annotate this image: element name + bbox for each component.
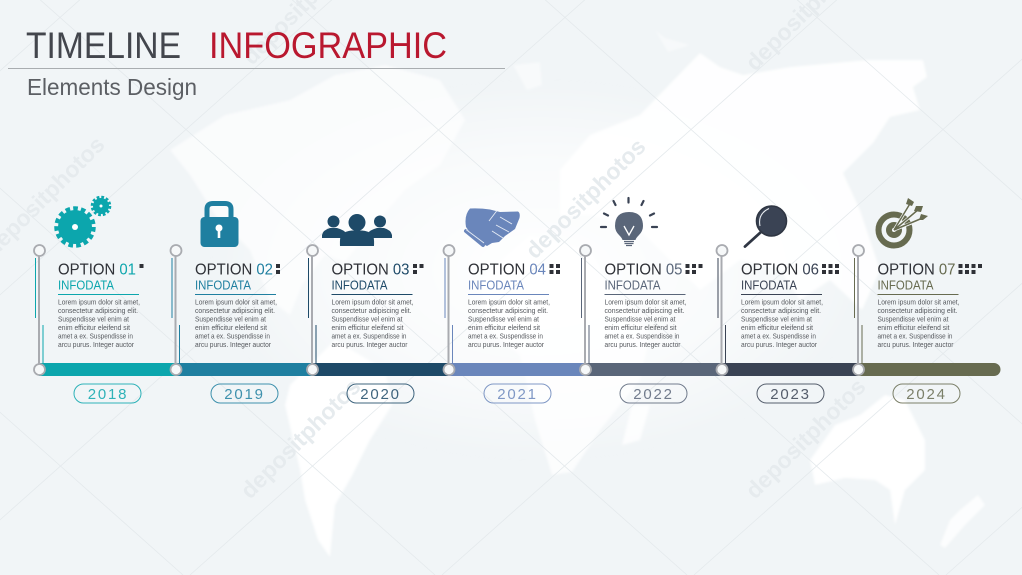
body text (468, 298, 550, 349)
progress squares (276, 264, 280, 274)
body text: enim efficitur eleifend sit (468, 323, 540, 332)
timeline bar (39, 363, 1000, 376)
body text (332, 298, 414, 349)
body text: enim efficitur eleifend sit (878, 323, 950, 332)
body text: amet a ex. Suspendisse in (604, 332, 680, 340)
body text: amet a ex. Suspendisse in (332, 332, 406, 340)
body text (58, 298, 140, 349)
year pill: 2019 (224, 386, 265, 403)
body text: arcu purus. Integer auctor (604, 340, 681, 349)
panel: option 07 (853, 198, 982, 403)
year pill: 2018 (88, 386, 128, 403)
icon: padlock (200, 204, 238, 247)
body text: enim efficitur eleifend sit (604, 323, 676, 332)
body text: Suspendisse vel enim at (468, 314, 539, 324)
option heading: OPTION 06 (741, 262, 819, 278)
year pill: 2021 (497, 386, 538, 403)
watermark text: depositphotos (740, 373, 871, 504)
option heading: OPTION 01 (58, 262, 136, 278)
panel: option 01 (34, 197, 144, 403)
year pill (74, 384, 141, 403)
icon: gears (56, 197, 110, 246)
watermark text: depositphotos (235, 373, 366, 504)
body text: Lorem ipsum dolor sit amet, (604, 298, 686, 306)
option heading: OPTION 07 (878, 262, 956, 278)
option heading: OPTION 02 (195, 262, 273, 278)
body text: Suspendisse vel enim at (604, 314, 676, 324)
body text: Suspendisse vel enim at (58, 314, 129, 324)
body text: Lorem ipsum dolor sit amet, (332, 298, 414, 306)
body text: amet a ex. Suspendisse in (878, 332, 952, 340)
year pill (893, 384, 960, 403)
year pill (211, 384, 278, 403)
background world map (170, 30, 985, 557)
year pill (347, 384, 414, 403)
icon: lightbulb (601, 198, 657, 246)
body text: enim efficitur eleifend sit (195, 323, 267, 332)
progress squares (958, 264, 982, 274)
body text: consectetur adipiscing elit. (468, 306, 548, 315)
icon: magnifying glass (745, 206, 786, 246)
infodata label: INFODATA (468, 278, 525, 292)
body text: consectetur adipiscing elit. (195, 306, 275, 315)
body text: arcu purus. Integer auctor (195, 340, 272, 349)
option heading: OPTION 05 (604, 262, 682, 278)
infodata label: INFODATA (604, 278, 661, 292)
option heading: OPTION 04 (468, 262, 546, 278)
progress squares (550, 264, 560, 274)
body text: amet a ex. Suspendisse in (741, 332, 816, 340)
icon: people (322, 214, 392, 246)
progress squares (413, 264, 424, 274)
body text: arcu purus. Integer auctor (468, 340, 545, 349)
body text: arcu purus. Integer auctor (878, 340, 954, 349)
body text: Suspendisse vel enim at (741, 314, 812, 324)
body text (741, 298, 823, 349)
year pill: 2020 (360, 386, 401, 403)
panel: option 03 (307, 214, 424, 403)
year pill (484, 384, 551, 403)
panel: option 06 (716, 206, 839, 403)
body text: arcu purus. Integer auctor (58, 340, 135, 349)
year pill: 2024 (906, 386, 947, 403)
year pill (757, 384, 824, 403)
body text: Suspendisse vel enim at (195, 314, 266, 324)
body text (604, 298, 686, 349)
body text: consectetur adipiscing elit. (604, 306, 684, 315)
title (26, 25, 447, 66)
body text: Lorem ipsum dolor sit amet, (195, 298, 277, 306)
infodata label: INFODATA (741, 278, 798, 292)
body text (195, 298, 277, 349)
title: TIMELINE (26, 25, 181, 66)
body text: Lorem ipsum dolor sit amet, (468, 298, 550, 306)
body text: enim efficitur eleifend sit (332, 323, 404, 332)
body text: Suspendisse vel enim at (332, 314, 402, 324)
body text: arcu purus. Integer auctor (741, 340, 818, 349)
infodata label: INFODATA (878, 278, 934, 292)
progress squares (140, 264, 144, 268)
infodata label: INFODATA (332, 278, 388, 292)
progress squares (822, 264, 839, 274)
body text: amet a ex. Suspendisse in (195, 332, 270, 340)
body text (878, 298, 960, 349)
body text: Lorem ipsum dolor sit amet, (741, 298, 823, 306)
body text: Lorem ipsum dolor sit amet, (878, 298, 960, 306)
body text: consectetur adipiscing elit. (58, 306, 138, 315)
body text: enim efficitur eleifend sit (58, 323, 130, 332)
body text: Suspendisse vel enim at (878, 314, 948, 324)
body text: amet a ex. Suspendisse in (58, 332, 133, 340)
progress squares (686, 264, 702, 274)
body text: arcu purus. Integer auctor (332, 340, 408, 349)
year pill: 2023 (770, 386, 811, 403)
icon: target with arrows (878, 198, 928, 246)
panel: option 05 (580, 198, 702, 403)
infodata label: INFODATA (195, 278, 252, 292)
body text: amet a ex. Suspendisse in (468, 332, 543, 340)
subtitle: Elements Design (27, 74, 197, 100)
panel: option 02 (170, 204, 280, 403)
body text: consectetur adipiscing elit. (332, 306, 412, 315)
watermark text: depositphotos (520, 133, 651, 264)
watermark text (0, 0, 871, 504)
icon: handshake (466, 208, 520, 246)
year pill (620, 384, 687, 403)
body text: consectetur adipiscing elit. (741, 306, 821, 315)
body text: enim efficitur eleifend sit (741, 323, 813, 332)
panel: option 04 (444, 208, 560, 403)
title: INFOGRAPHIC (209, 25, 447, 66)
infodata label: INFODATA (58, 278, 115, 292)
year pill: 2022 (633, 386, 674, 403)
option heading: OPTION 03 (332, 262, 410, 278)
body text: consectetur adipiscing elit. (878, 306, 958, 315)
body text: Lorem ipsum dolor sit amet, (58, 298, 140, 306)
